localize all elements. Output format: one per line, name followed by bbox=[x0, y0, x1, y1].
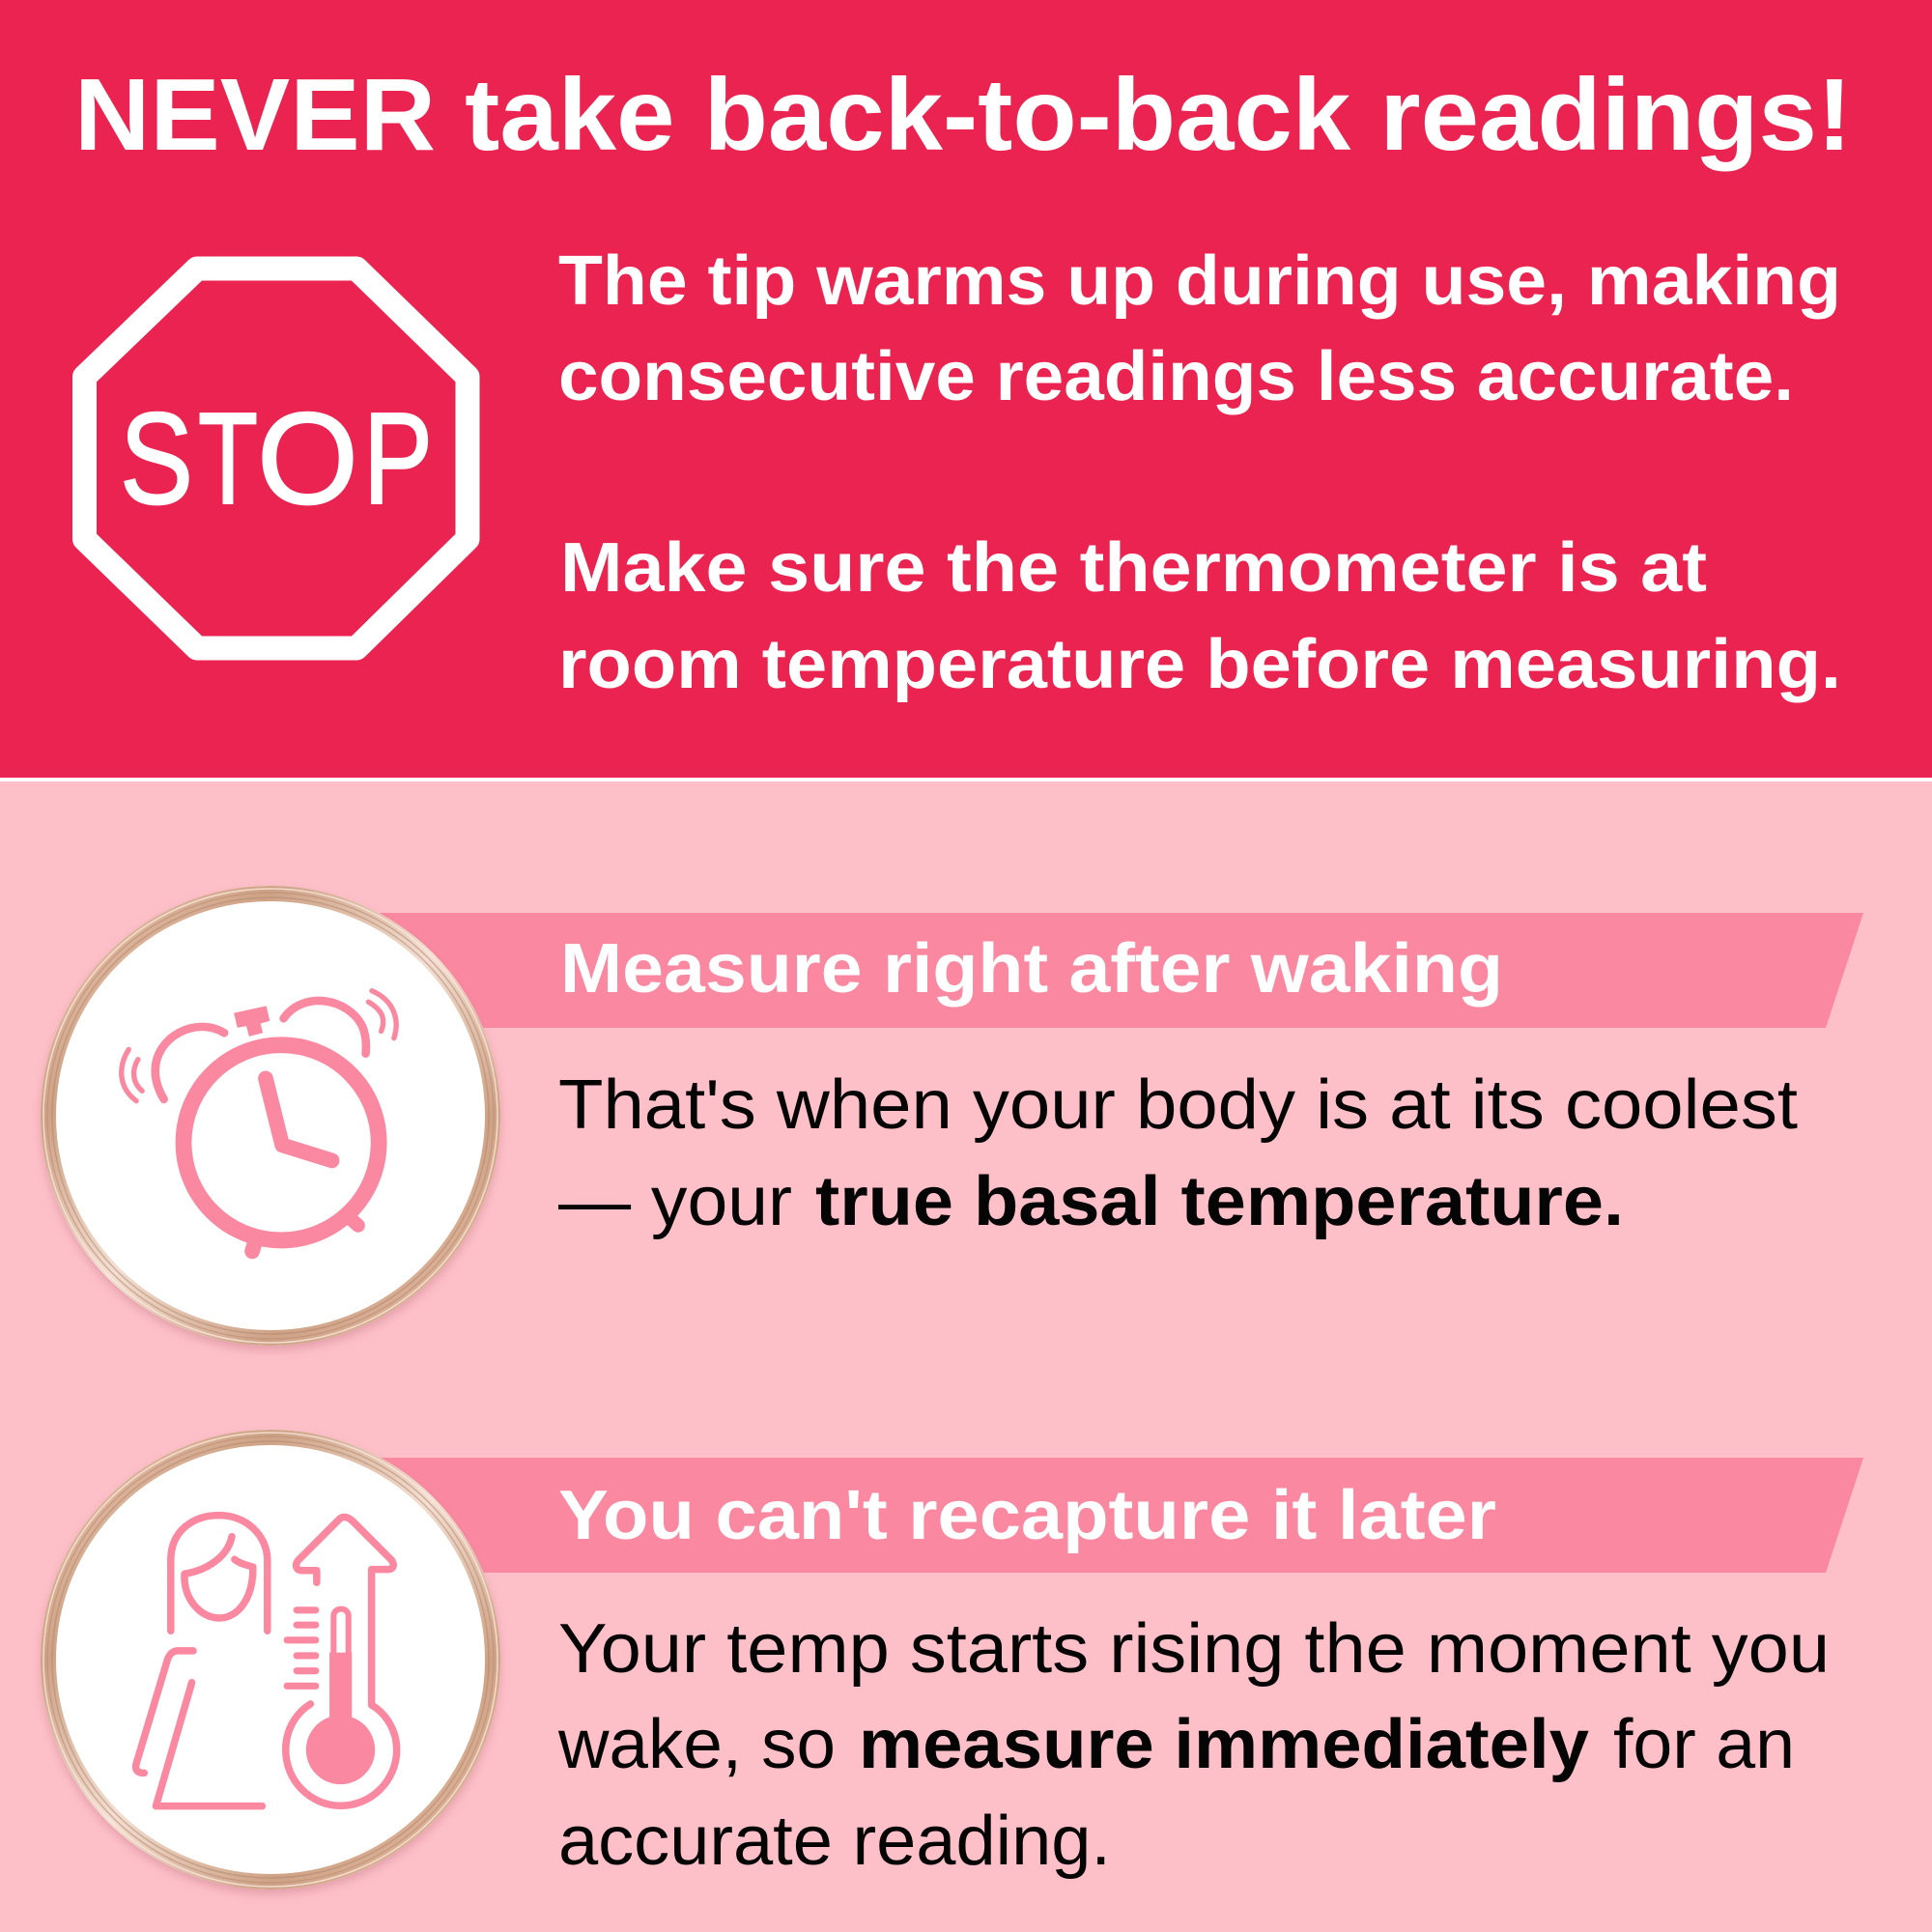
icon: stop sign: T bbox=[198, 385, 258, 531]
icon badge: alarm clock bbox=[41, 886, 500, 1350]
text block: warning explanation bbox=[558, 242, 1841, 703]
icon: stop sign: O bbox=[257, 385, 358, 531]
icon: stop sign: S bbox=[120, 385, 193, 531]
text block: measure immediately: for an bbox=[1613, 1706, 1795, 1783]
text block: measure immediately: measure immediately bbox=[859, 1706, 1589, 1783]
text block: coolest body temperature bbox=[558, 1066, 1798, 1240]
panel: you can't recapture it later bbox=[41, 1430, 1863, 1893]
heading banner: you can't recapture it later bbox=[348, 1458, 1863, 1573]
icon badge: woman and rising thermometer bbox=[41, 1430, 500, 1893]
text block: coolest body temperature: true basal temperature. bbox=[815, 1163, 1624, 1240]
text block: measure immediately bbox=[557, 1610, 1830, 1880]
title: NEVER take back-to-back readings! bbox=[74, 58, 1852, 172]
text block: measure immediately: accurate reading. bbox=[558, 1803, 1111, 1880]
panel: measure right after waking bbox=[41, 886, 1863, 1350]
text block: measure immediately: wake, so bbox=[557, 1706, 836, 1783]
heading banner: measure right after waking bbox=[348, 913, 1863, 1028]
icon: stop sign bbox=[85, 269, 468, 648]
panel: red warning section bbox=[0, 0, 1932, 778]
text block: warning explanation: room temperature before measuring. bbox=[558, 626, 1841, 703]
text block: warning explanation: The tip warms up during use, making bbox=[558, 242, 1841, 320]
text block: warning explanation: Make sure the thermometer is at bbox=[560, 529, 1707, 607]
heading banner: measure right after waking: Measure right after waking bbox=[560, 930, 1503, 1008]
text block: warning explanation: consecutive readings less accurate. bbox=[558, 338, 1794, 415]
heading banner: you can't recapture it later: You can't recapture it later bbox=[558, 1477, 1496, 1554]
icon: stop sign: P bbox=[363, 385, 433, 531]
text block: measure immediately: Your temp starts rising the moment you bbox=[558, 1610, 1830, 1688]
text block: coolest body temperature: That's when your body is at its coolest bbox=[558, 1066, 1798, 1144]
text block: coolest body temperature: — your bbox=[558, 1163, 792, 1240]
